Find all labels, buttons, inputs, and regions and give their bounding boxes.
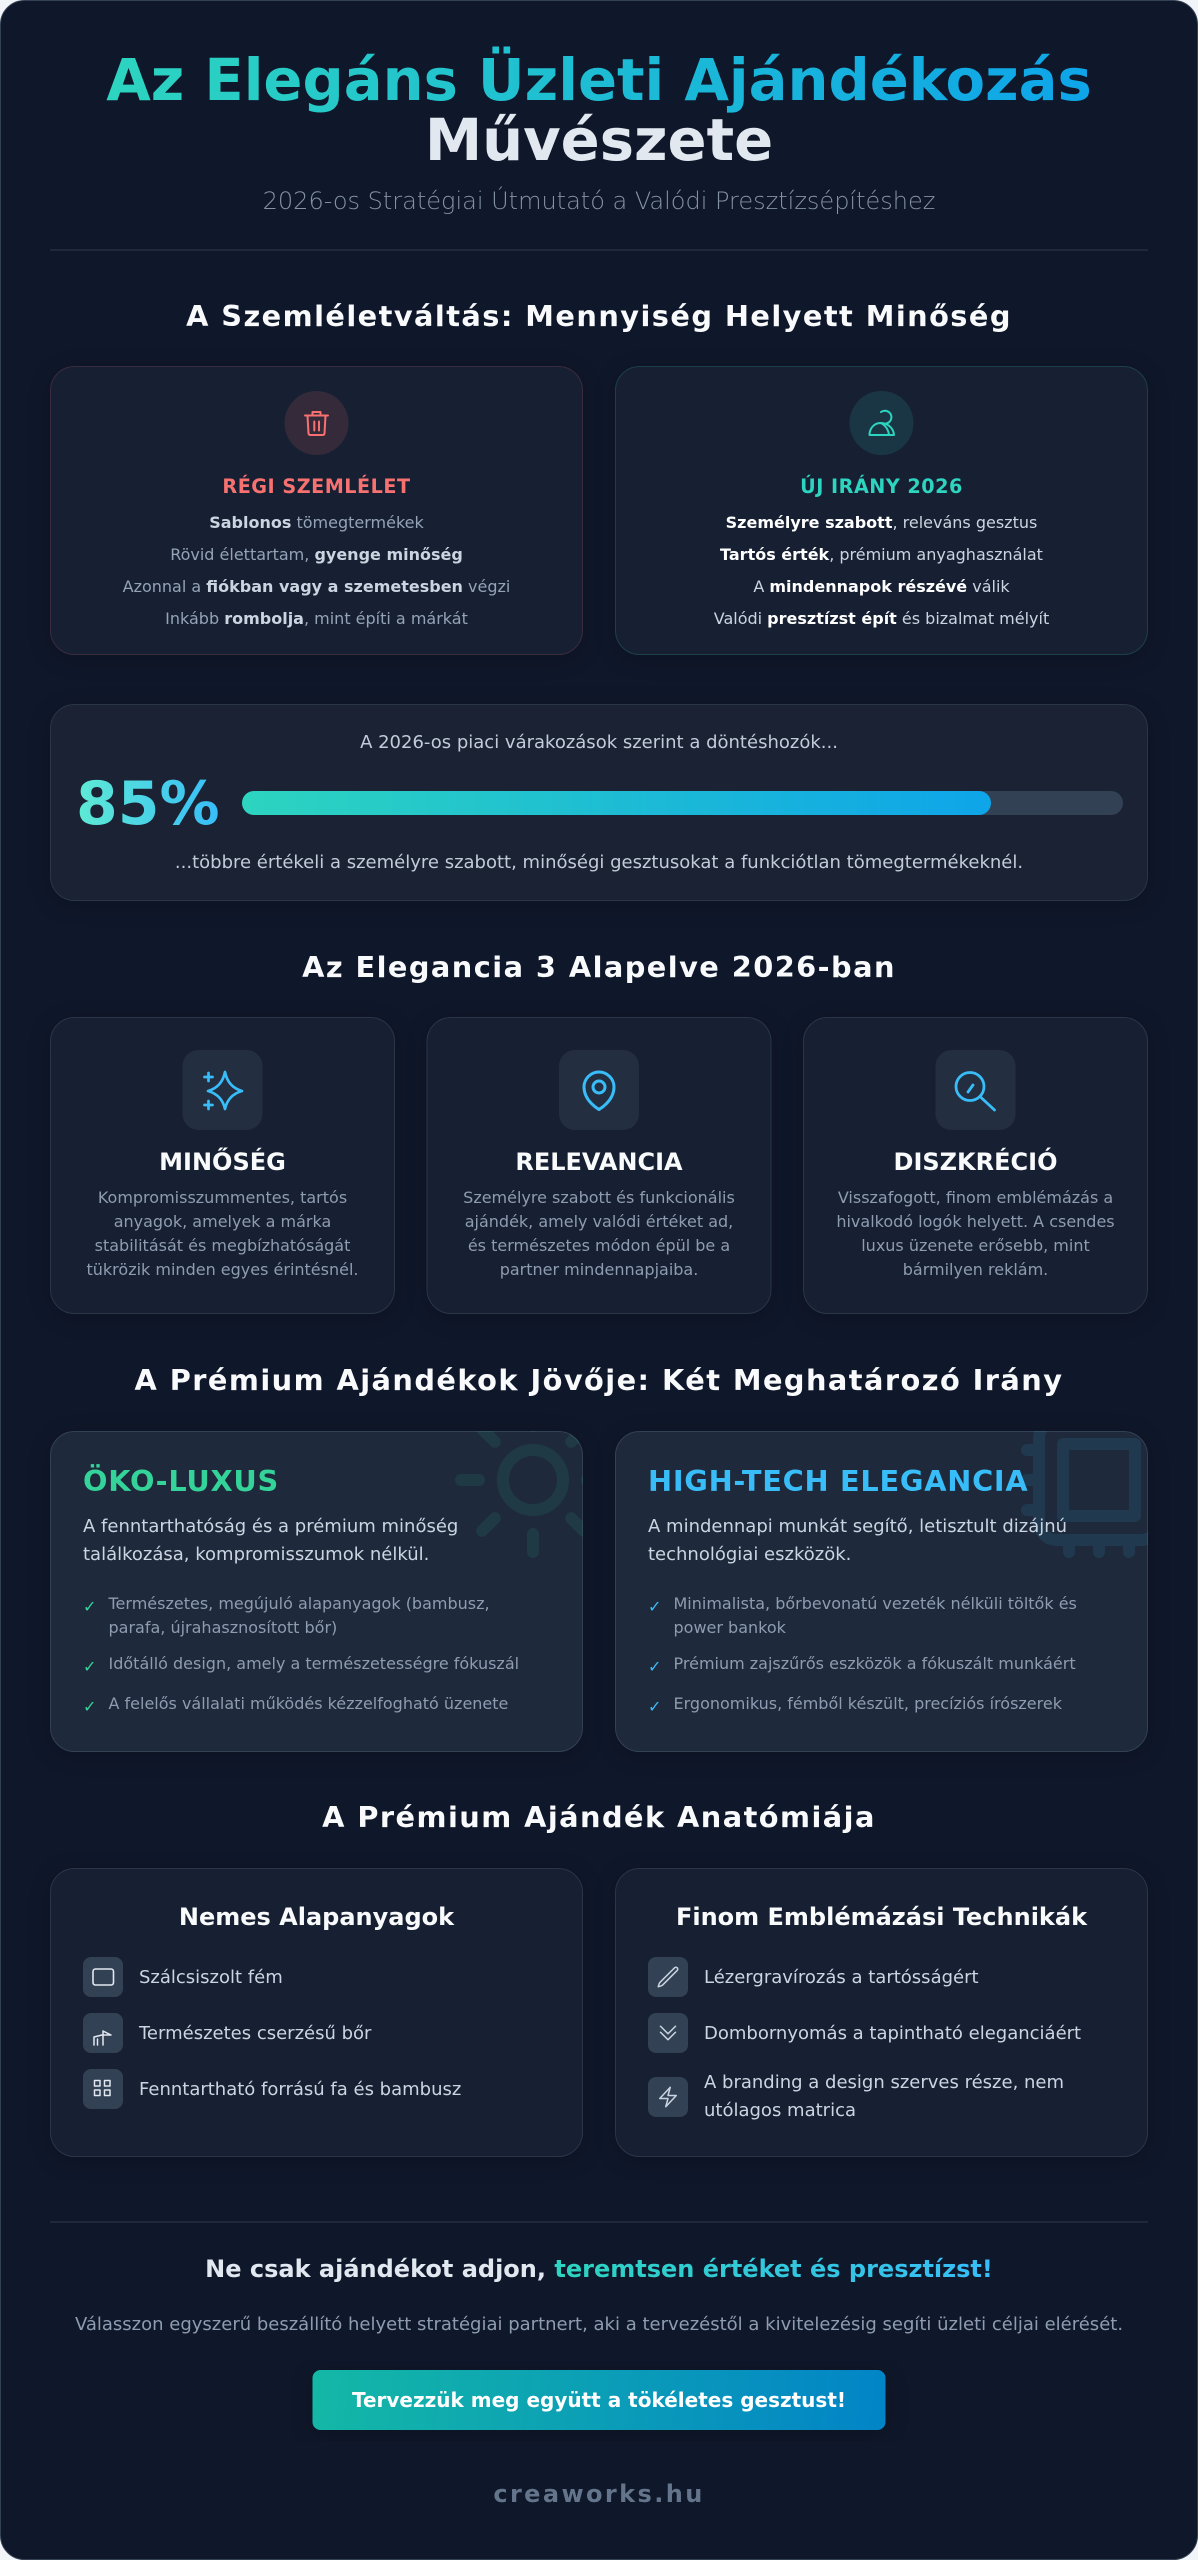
panel: 85% statistic xyxy=(50,704,1148,900)
technique: embossing: Dombornyomás a tapintható eleganciáért xyxy=(704,2023,1081,2044)
description: hivalkodó logók helyett. A csendes xyxy=(836,1212,1115,1231)
checklist: A felelős vállalati működés kézzelfogható üzenete xyxy=(108,1694,508,1713)
checklist: Ergonomikus, fémből készült, precíziós írószerek xyxy=(674,1694,1063,1713)
progress bar xyxy=(242,791,1123,815)
material: wood: Fenntartható forrású fa és bambusz xyxy=(139,2079,461,2100)
icon: sparkles xyxy=(182,1050,262,1130)
checklist xyxy=(674,1594,1077,1713)
intro xyxy=(648,1516,1067,1565)
technique: embossing xyxy=(648,2013,1081,2053)
technique: organic branding xyxy=(648,2072,1064,2121)
heading: paradigm shift: A Szemléletváltás: Mennyiség Helyett Minőség xyxy=(186,299,1012,333)
icon: chip watermark xyxy=(1021,1431,1148,1558)
icon: magnifier xyxy=(936,1050,1016,1130)
intro xyxy=(83,1516,458,1565)
intro: A fenntarthatóság és a prémium minőség xyxy=(83,1516,458,1537)
description: Visszafogott, finom emblémázás a xyxy=(838,1188,1113,1207)
panel: quality xyxy=(50,1018,394,1314)
checklist xyxy=(108,1594,519,1713)
panel: relevance xyxy=(427,1018,771,1314)
list: Tartós érték, prémium anyaghasználat xyxy=(720,545,1043,564)
intro: technológiai eszközök. xyxy=(648,1544,851,1565)
panel title: Finom Emblémázási Technikák xyxy=(676,1903,1088,1931)
stat number: 85% xyxy=(76,769,220,839)
list: Rövid élettartam, gyenge minőség xyxy=(170,545,463,564)
description: és természetes módon épül be a xyxy=(468,1236,730,1255)
icon: person xyxy=(850,391,914,455)
icon: trash xyxy=(284,391,348,455)
description: partner mindennapjaiba. xyxy=(500,1260,698,1279)
panel: high-tech elegance xyxy=(615,1431,1148,1752)
panel: old view xyxy=(50,366,582,654)
call to action xyxy=(75,2255,1123,2430)
list xyxy=(714,513,1049,628)
panel: discretion xyxy=(804,1018,1148,1314)
list: Inkább rombolja, mint építi a márkát xyxy=(165,609,468,628)
description: tükrözik minden egyes érintésnél. xyxy=(86,1260,358,1279)
description: ajándék, amely valódi értéket ad, xyxy=(465,1212,733,1231)
cta headline: Ne csak ajándékot adjon, teremtsen értéket és presztízst! xyxy=(205,2255,993,2283)
name: RELEVANCIA xyxy=(515,1148,683,1176)
check marks: ✓ xyxy=(83,1597,96,1616)
description: Kompromisszummentes, tartós xyxy=(98,1188,347,1207)
check marks: ✓ xyxy=(83,1697,96,1716)
technique: organic branding: utólagos matrica xyxy=(704,2100,856,2121)
technique: engraving: Lézergravírozás a tartósságért xyxy=(704,1967,979,1988)
checklist: Minimalista, bőrbevonatú vezeték nélküli töltők és xyxy=(674,1594,1077,1613)
header xyxy=(106,47,1092,215)
description: luxus üzenete erősebb, mint xyxy=(861,1236,1090,1255)
list: Személyre szabott, releváns gesztus xyxy=(726,513,1037,532)
heading: two directions: A Prémium Ajándékok Jövője: Két Meghatározó Irány xyxy=(135,1363,1063,1397)
material: metal xyxy=(83,1957,283,1997)
heading: three principles: Az Elegancia 3 Alapelve 2026-ban xyxy=(302,950,896,984)
intro: találkozása, kompromisszumok nélkül. xyxy=(83,1544,429,1565)
name: MINŐSÉG xyxy=(159,1146,286,1176)
check marks xyxy=(648,1597,661,1716)
title: Művészete xyxy=(425,107,773,174)
heading: anatomy: A Prémium Ajándék Anatómiája xyxy=(322,1800,876,1834)
check marks: ✓ xyxy=(648,1697,661,1716)
label: RÉGI SZEMLÉLET xyxy=(222,475,411,498)
button: Tervezzük meg együtt a tökéletes gesztust! xyxy=(352,2388,846,2412)
panel title: Nemes Alapanyagok xyxy=(179,1903,455,1931)
label: ÚJ IRÁNY 2026 xyxy=(800,474,963,498)
title: Az Elegáns Üzleti Ajándékozás xyxy=(106,47,1092,114)
description xyxy=(836,1188,1115,1279)
name: DISZKRÉCIÓ xyxy=(894,1146,1057,1176)
list: A mindennapok részévé válik xyxy=(753,577,1010,596)
description xyxy=(86,1188,358,1279)
title: HIGH-TECH ELEGANCIA xyxy=(648,1464,1028,1498)
material: leather: Természetes cserzésű bőr xyxy=(138,2023,372,2044)
list: Sablonos tömegtermékek xyxy=(209,513,424,532)
check marks: ✓ xyxy=(83,1657,96,1676)
subtitle: 2026-os Stratégiai Útmutató a Valódi Presztízsépítéshez xyxy=(263,185,935,215)
checklist: power bankok xyxy=(674,1618,787,1637)
checklist: Prémium zajszűrős eszközök a fókuszált munkáért xyxy=(674,1654,1076,1673)
description: Személyre szabott és funkcionális xyxy=(463,1188,735,1207)
checklist: parafa, újrahasznosított bőr) xyxy=(108,1618,337,1637)
check marks: ✓ xyxy=(648,1597,661,1616)
title: ÖKO-LUXUS xyxy=(83,1464,279,1498)
technique: engraving xyxy=(648,1957,979,1997)
description: bármilyen reklám. xyxy=(903,1260,1048,1279)
technique: organic branding: A branding a design szerves része, nem xyxy=(704,2072,1064,2093)
checklist: Időtálló design, amely a természetességre fókuszál xyxy=(108,1654,519,1673)
brand: creaworks.hu xyxy=(493,2480,705,2508)
description: stabilitását és megbízhatóságát xyxy=(95,1236,350,1255)
icon: map pin xyxy=(559,1050,639,1130)
panel: materials xyxy=(50,1868,582,2156)
icon: sun watermark xyxy=(455,1431,583,1558)
description xyxy=(463,1188,735,1279)
list: Valódi presztízst épít és bizalmat mélyít xyxy=(714,609,1049,628)
description: anyagok, amelyek a márka xyxy=(114,1212,331,1231)
panel: new direction xyxy=(616,366,1148,654)
material: leather xyxy=(83,2013,372,2053)
material: wood xyxy=(83,2069,461,2109)
panel: branding techniques xyxy=(616,1868,1148,2156)
intro: A mindennapi munkát segítő, letisztult dizájnú xyxy=(648,1516,1067,1537)
check marks xyxy=(83,1597,96,1716)
panel: eco luxury xyxy=(50,1431,583,1752)
title xyxy=(106,47,1092,174)
material: metal: Szálcsiszolt fém xyxy=(139,1967,283,1988)
cta text: Válasszon egyszerű beszállító helyett stratégiai partnert, aki a tervezéstől a kivitelezésig segíti üzleti céljai elérését. xyxy=(75,2314,1123,2335)
list: Azonnal a fiókban vagy a szemetesben végzi xyxy=(123,577,510,596)
stat intro: A 2026-os piaci várakozások szerint a döntéshozók... xyxy=(360,732,838,753)
stat caption: ...többre értékeli a személyre szabott, minőségi gesztusokat a funkciótlan tömegtermékeknél. xyxy=(175,852,1023,873)
list xyxy=(123,513,510,628)
button xyxy=(312,2370,886,2430)
checklist: Természetes, megújuló alapanyagok (bambusz, xyxy=(108,1594,490,1613)
check marks: ✓ xyxy=(648,1657,661,1676)
